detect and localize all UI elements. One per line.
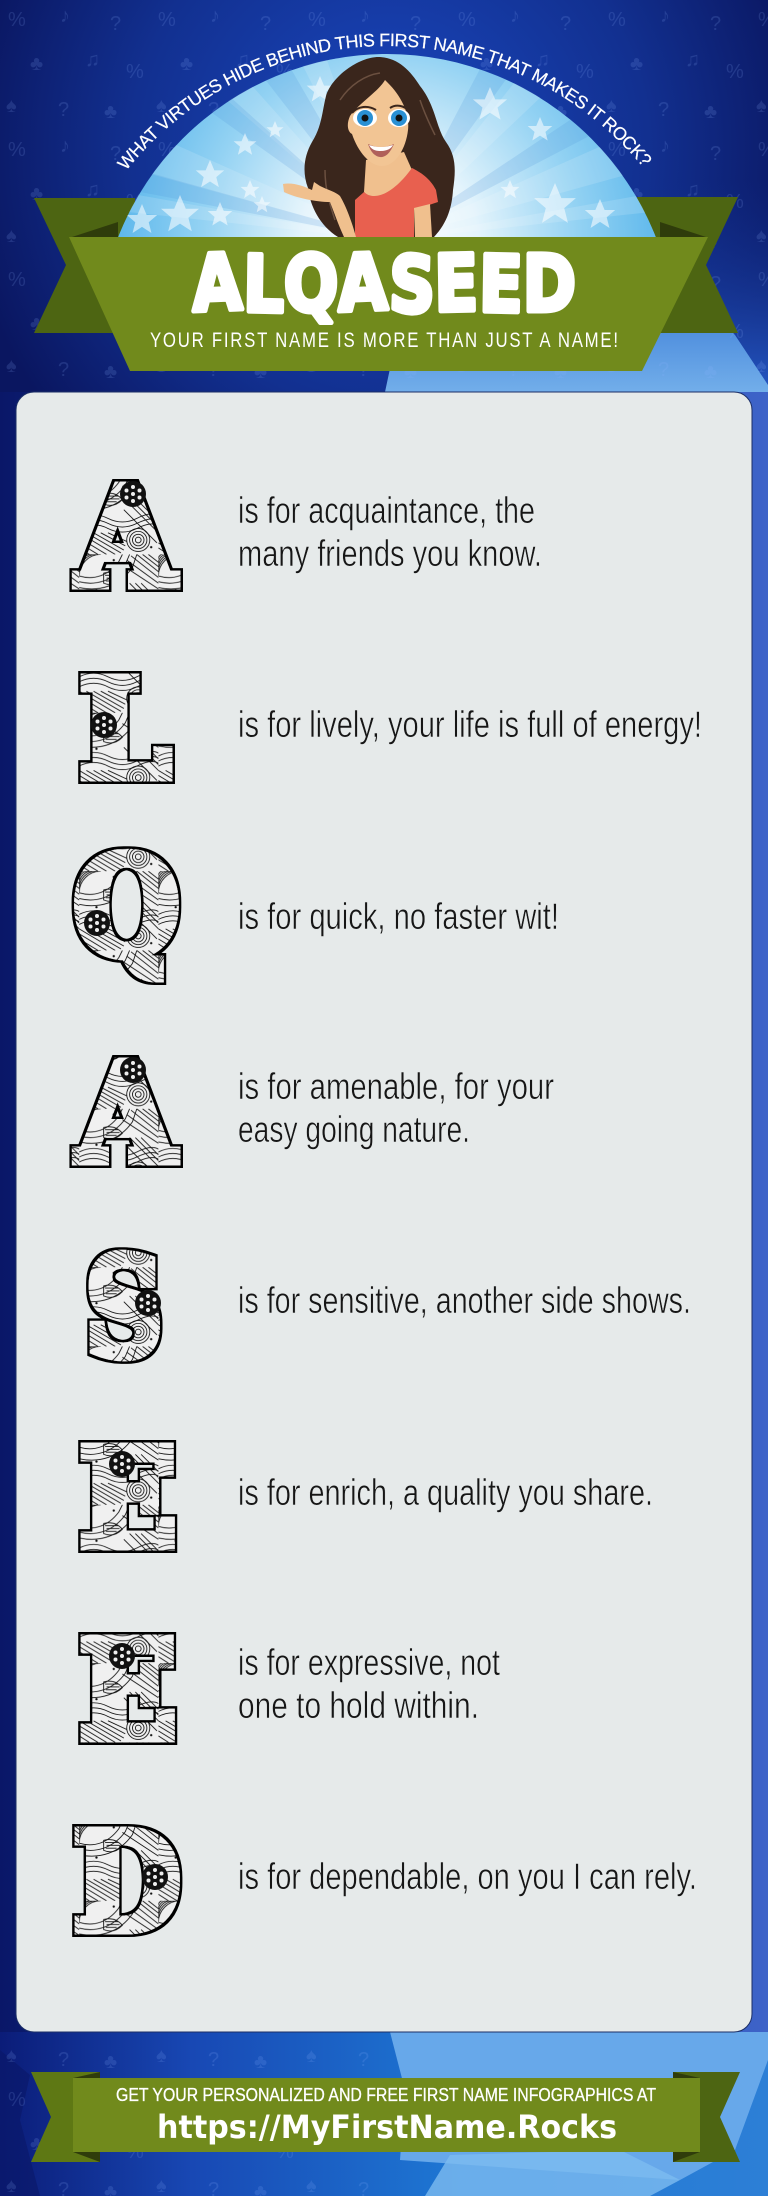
title: ALQASEED [191, 238, 576, 332]
row: E expressive [80, 1613, 501, 1769]
hair [305, 57, 455, 237]
text: easy going nature. [238, 1109, 470, 1150]
row: A acquaintance [76, 460, 542, 616]
mouth [368, 144, 394, 157]
fold shadow left [72, 222, 118, 237]
row: L lively [80, 652, 702, 808]
row: A amenable [76, 1036, 554, 1192]
ribbon tail right [673, 2072, 740, 2162]
panel [16, 392, 752, 2032]
main ribbon [69, 237, 708, 371]
back ribbon left [34, 198, 135, 333]
ribbon tail left [31, 2072, 100, 2162]
row: E enrich [80, 1421, 653, 1577]
character: woman [283, 57, 455, 237]
subtitle: YOUR FIRST NAME IS MORE THAN JUST A NAME! [150, 329, 618, 353]
letter E: E [80, 1613, 176, 1769]
back ribbon right [637, 197, 738, 333]
text [238, 1642, 501, 1726]
curved tagline: WHAT VIRTUES HIDE BEHIND THIS FIRST NAME THAT MAKES IT ROCK? [116, 34, 652, 168]
footer line 1: GET YOUR PERSONALIZED AND FREE FIRST NAME INFOGRAPHICS AT [116, 2084, 656, 2105]
left arm and hand [283, 182, 356, 237]
letter A: A [76, 460, 176, 616]
fold shadow right [660, 222, 706, 237]
letter L: L [80, 652, 170, 808]
text: many friends you know. [238, 533, 542, 574]
dome with sunburst and stars [118, 54, 656, 237]
text [238, 490, 542, 574]
face [348, 80, 408, 166]
text: is for expressive, not [238, 1642, 501, 1683]
letter E: E [80, 1421, 176, 1577]
row: S sensitive [86, 1230, 691, 1386]
letter Q: Q [74, 829, 179, 985]
footer ribbon [31, 2072, 740, 2162]
letter D: D [74, 1805, 180, 1961]
right arm [414, 204, 432, 237]
row: Q quick [74, 829, 559, 985]
eyes [352, 106, 410, 127]
neck [364, 152, 412, 200]
text: is for enrich, a quality you share. [238, 1472, 653, 1513]
row: D dependable [74, 1805, 697, 1961]
footer url: https://MyFirstName.Rocks [157, 2108, 617, 2146]
text: one to hold within. [238, 1685, 479, 1726]
text: is for quick, no faster wit! [238, 896, 559, 937]
letter S: S [86, 1230, 162, 1386]
shirt [355, 168, 438, 237]
letter A: A [76, 1036, 176, 1192]
text [238, 1066, 554, 1150]
text: is for amenable, for your [238, 1066, 554, 1107]
text: is for acquaintance, the [238, 490, 535, 531]
